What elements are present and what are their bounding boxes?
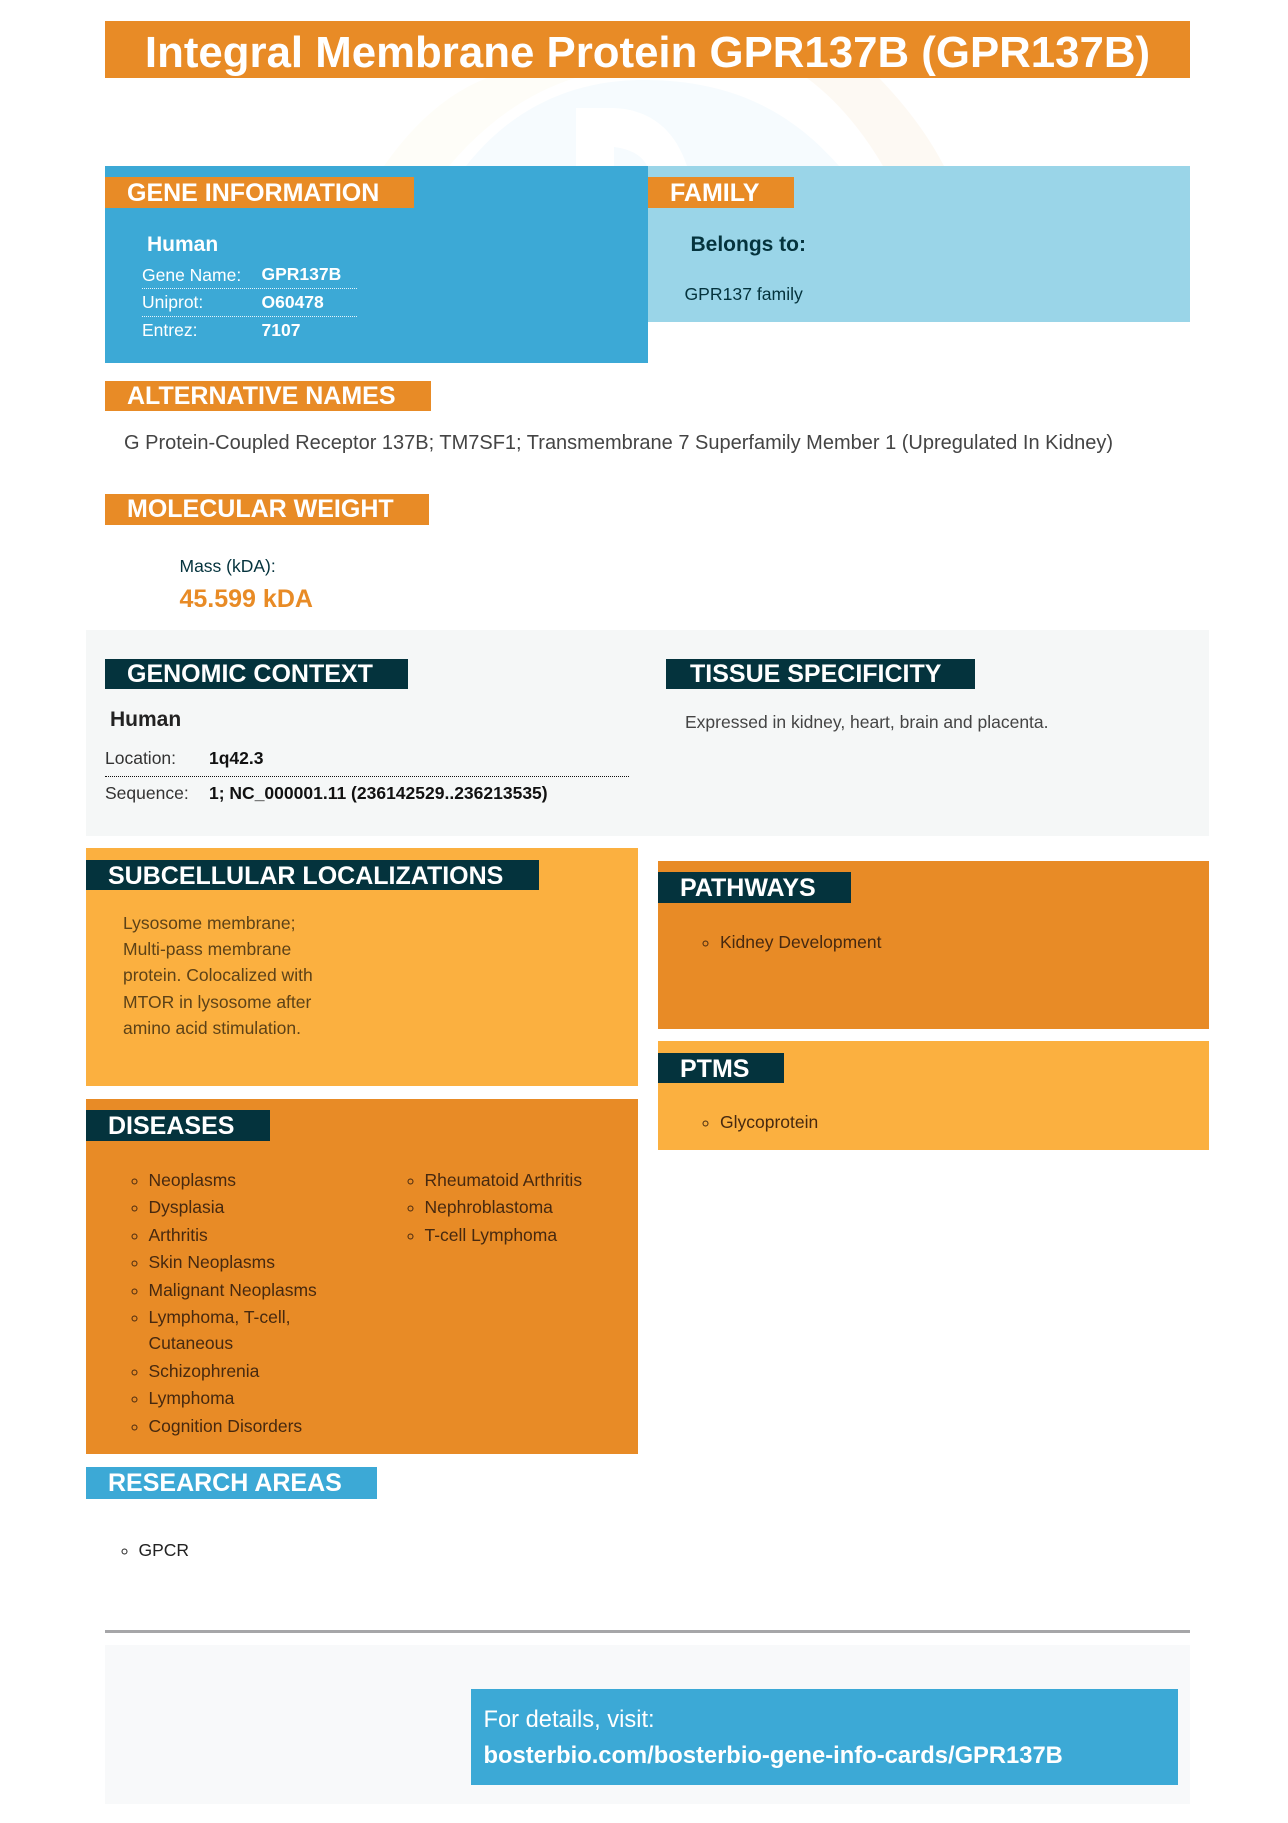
panel: footer bbox=[105, 1645, 1190, 1804]
species label: Human bbox=[147, 233, 218, 256]
heading: genomic context: GENOMIC CONTEXT bbox=[127, 660, 373, 688]
heading: family bbox=[648, 177, 794, 208]
heading: diseases: DISEASES bbox=[108, 1112, 234, 1140]
alternative names text: G Protein-Coupled Receptor 137B; TM7SF1; Transmembrane 7 Superfamily Member 1 (Upregulated In Kidney) bbox=[124, 432, 1113, 454]
genomic location table bbox=[105, 748, 629, 803]
gene identifiers table: O60478 bbox=[262, 292, 324, 312]
panel: family bbox=[648, 166, 1190, 322]
diseases list column 1: Cutaneous bbox=[148, 1333, 233, 1353]
callout label: For details, visit: bbox=[484, 1706, 655, 1732]
diseases list column 1: Neoplasms bbox=[148, 1170, 236, 1190]
localization text: MTOR in lysosome after bbox=[123, 992, 311, 1012]
heading: molecular weight: MOLECULAR WEIGHT bbox=[127, 495, 394, 523]
panel: subcellular localizations bbox=[86, 848, 638, 1086]
diseases list column 2 bbox=[408, 1170, 582, 1245]
family value: GPR137 family bbox=[684, 284, 803, 304]
genomic location table: 1; NC_000001.11 (236142529..236213535) bbox=[209, 783, 548, 803]
diseases list column 1: Arthritis bbox=[148, 1225, 208, 1245]
panel: ptms bbox=[658, 1041, 1209, 1150]
footer divider bbox=[105, 1630, 1190, 1633]
localization text: Multi-pass membrane bbox=[123, 939, 291, 959]
heading: gene information: GENE INFORMATION bbox=[127, 179, 379, 207]
pathways list: Kidney Development bbox=[720, 932, 881, 952]
research areas list: GPCR bbox=[138, 1540, 189, 1560]
species label: Human bbox=[110, 708, 181, 731]
heading: diseases bbox=[86, 1110, 270, 1141]
mass value: 45.599 kDA bbox=[180, 585, 313, 613]
diseases list column 1: Dysplasia bbox=[148, 1197, 224, 1217]
gene identifiers table: 7107 bbox=[262, 320, 300, 340]
heading: research areas: RESEARCH AREAS bbox=[108, 1469, 342, 1497]
diseases list column 1: Schizophrenia bbox=[148, 1361, 259, 1381]
diseases list column 1: Skin Neoplasms bbox=[148, 1252, 275, 1272]
heading: ptms: PTMS bbox=[680, 1055, 749, 1083]
mass label: Mass (kDA): bbox=[180, 556, 276, 576]
callout url: bosterbio.com/bosterbio-gene-info-cards/GPR137B bbox=[484, 1742, 1063, 1768]
panel: genomic context and tissue specificity bbox=[86, 630, 1209, 836]
title: Integral Membrane Protein GPR137B (GPR137B) bbox=[145, 28, 1150, 77]
gene identifiers table: Entrez: bbox=[142, 320, 197, 340]
gene identifiers table bbox=[142, 264, 357, 340]
genomic location table: 1q42.3 bbox=[209, 748, 263, 768]
gene identifiers table: GPR137B bbox=[262, 264, 341, 284]
localization text: protein. Colocalized with bbox=[123, 965, 313, 985]
diseases list column 1 bbox=[132, 1170, 317, 1436]
heading: alternative names: ALTERNATIVE NAMES bbox=[127, 382, 396, 410]
tissue specificity text: Expressed in kidney, heart, brain and placenta. bbox=[685, 712, 1049, 732]
watermark logo bbox=[466, 78, 944, 166]
ptms list: Glycoprotein bbox=[720, 1112, 818, 1132]
gene identifiers table: Gene Name: bbox=[142, 265, 241, 285]
panel: pathways bbox=[658, 861, 1209, 1029]
diseases list column 2: Rheumatoid Arthritis bbox=[424, 1170, 582, 1190]
localization text: amino acid stimulation. bbox=[123, 1018, 301, 1038]
diseases list column 2: Nephroblastoma bbox=[424, 1197, 553, 1217]
diseases list column 1: Lymphoma bbox=[148, 1388, 234, 1408]
gene identifiers table: Uniprot: bbox=[142, 292, 203, 312]
genomic location table: Location: bbox=[105, 748, 176, 768]
diseases list column 1: Cognition Disorders bbox=[148, 1416, 302, 1436]
localization text bbox=[123, 913, 313, 1038]
diseases list column 1: Malignant Neoplasms bbox=[148, 1280, 317, 1300]
heading: family: FAMILY bbox=[670, 179, 759, 207]
heading: subcellular localizations: SUBCELLULAR LOCALIZATIONS bbox=[108, 862, 503, 890]
localization text: Lysosome membrane; bbox=[123, 913, 295, 933]
heading: ptms bbox=[658, 1053, 784, 1083]
heading: pathways bbox=[658, 872, 851, 903]
diseases list column 2: T-cell Lymphoma bbox=[424, 1225, 557, 1245]
belongs to label: Belongs to: bbox=[690, 233, 806, 256]
panel: diseases bbox=[86, 1099, 638, 1454]
genomic location table: Sequence: bbox=[105, 783, 189, 803]
panel: gene information bbox=[105, 166, 648, 363]
callout: details link bbox=[471, 1689, 1178, 1785]
heading: tissue specificity: TISSUE SPECIFICITY bbox=[690, 660, 941, 688]
heading: pathways: PATHWAYS bbox=[680, 874, 816, 902]
diseases list column 1: Lymphoma, T-cell, bbox=[148, 1307, 290, 1327]
